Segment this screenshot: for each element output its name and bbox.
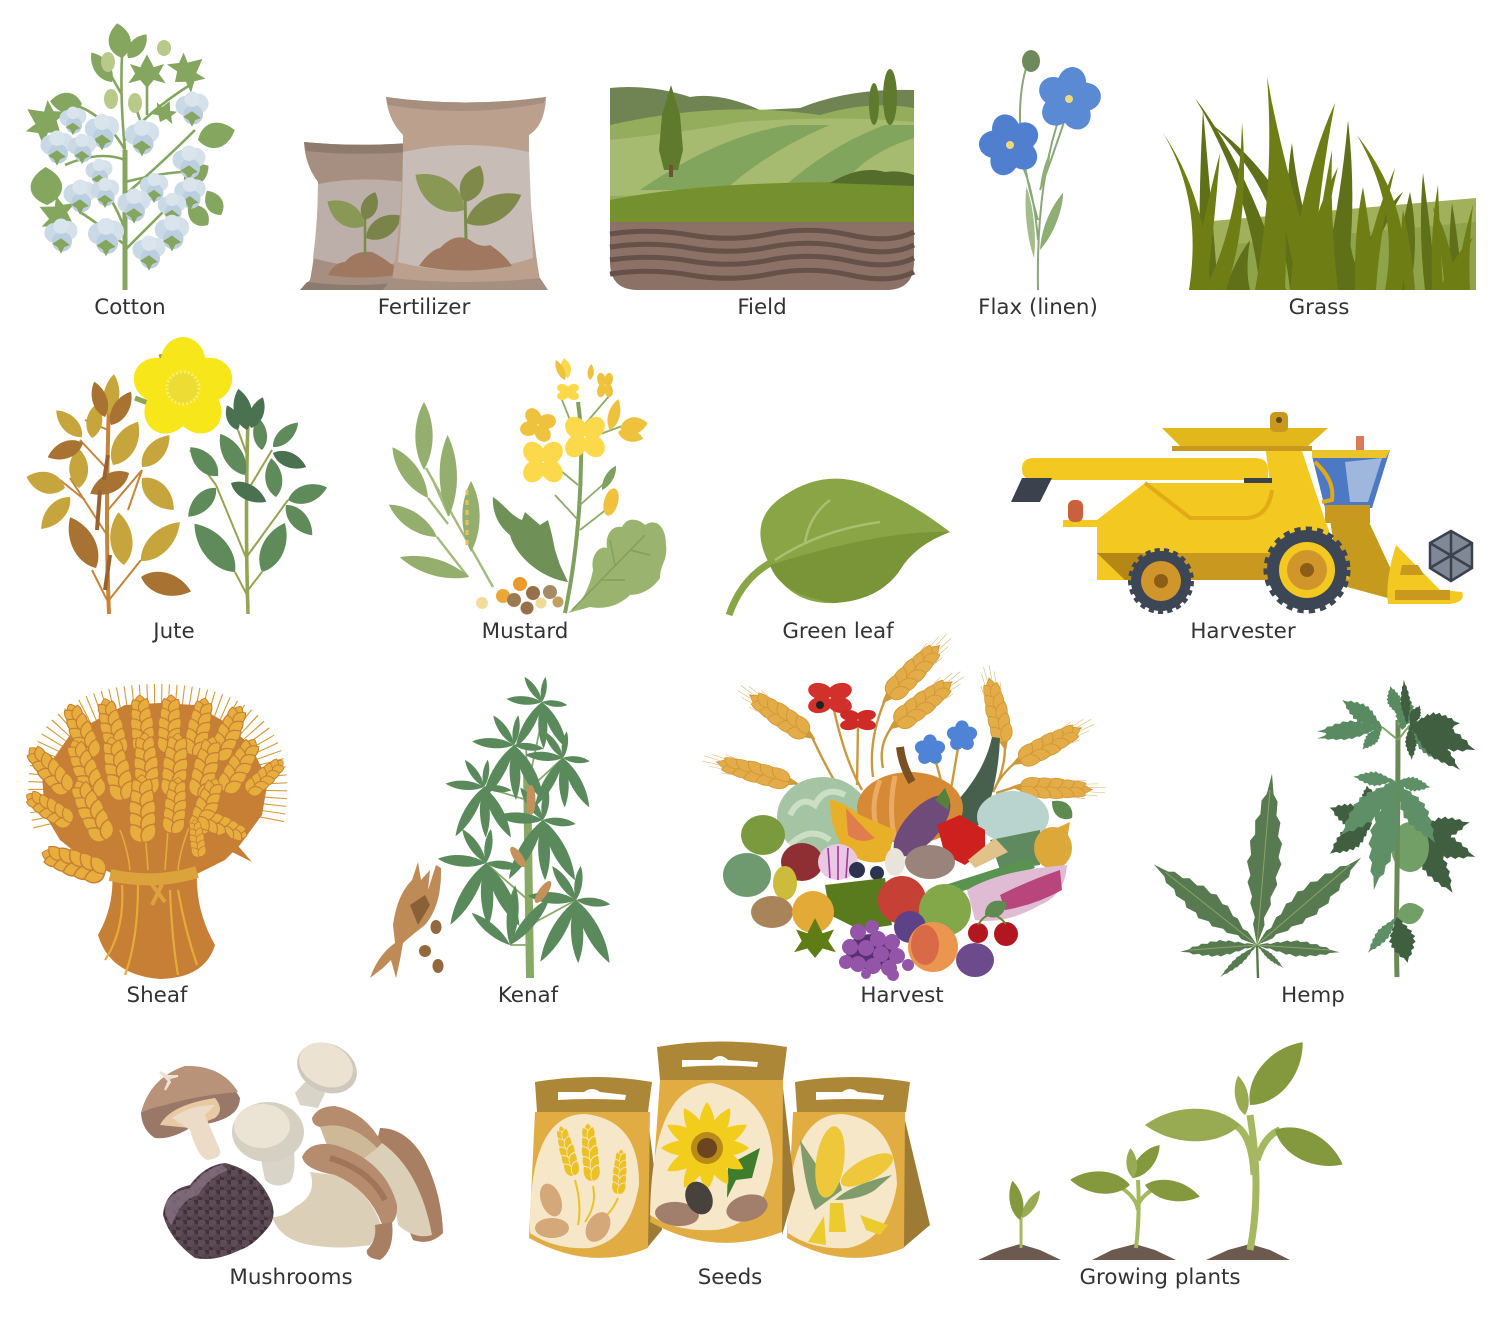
label: Mustard: Mustard [482, 619, 568, 644]
icon: hemp leaf [1145, 772, 1371, 980]
icon: kenaf plant [370, 675, 616, 978]
panel: seeds [529, 1042, 930, 1290]
icon: shiitake mushroom [141, 1066, 240, 1160]
label: Harvester: Harvester [1190, 619, 1296, 644]
icon: soil mounds [978, 1244, 1290, 1260]
panel: sheaf [18, 694, 291, 1008]
panel: green leaf [729, 479, 950, 644]
icon: seed packet sunflower [650, 1042, 795, 1243]
icon: jute plant [24, 337, 330, 614]
icon: seedling stages [1006, 1032, 1349, 1250]
label: Hemp: Hemp [1281, 983, 1345, 1008]
label: Jute: Jute [151, 619, 195, 644]
icon: large fertilizer bag [383, 97, 548, 290]
icon: harvest still life [700, 625, 1106, 981]
icon: flax plant [969, 50, 1109, 290]
label: Grass: Grass [1289, 295, 1349, 320]
label: Harvest: Harvest [860, 983, 944, 1008]
panel: field [610, 69, 914, 320]
label: Cotton: Cotton [94, 295, 166, 320]
icon: wheat sheaf [18, 694, 291, 979]
panel: harvest [700, 625, 1106, 1008]
icon: white button mushroom top [289, 1033, 365, 1108]
panel: mushrooms [141, 1033, 443, 1290]
panel: harvester [1011, 412, 1472, 644]
panel: grass [1163, 77, 1476, 320]
label: Fertilizer: Fertilizer [378, 295, 470, 320]
label: Seeds: Seeds [698, 1265, 762, 1290]
icon: grass tuft [1163, 77, 1476, 290]
panel: hemp [1145, 679, 1480, 1008]
icon: oyster mushrooms [272, 1106, 443, 1260]
label: Growing plants: Growing plants [1079, 1265, 1241, 1290]
icon: black truffle [163, 1163, 274, 1259]
icon: hemp plant [1316, 679, 1480, 977]
panel: mustard [384, 357, 666, 644]
icon: seed packet corn [787, 1077, 930, 1258]
panel: growing plants [978, 1032, 1349, 1290]
panel: jute [24, 337, 330, 644]
icon: farm field landscape [610, 69, 914, 290]
icon: mustard plant [384, 357, 666, 614]
label: Mushrooms: Mushrooms [229, 1265, 353, 1290]
icon: seed packet wheat [529, 1077, 662, 1258]
icon: green leaf [729, 479, 950, 615]
icon: combine harvester [1011, 412, 1472, 611]
panel: cotton [15, 22, 238, 320]
label: Flax (linen): Flax (linen) [978, 295, 1098, 320]
label: Green leaf: Green leaf [782, 619, 894, 644]
icon: white button mushroom middle [232, 1102, 304, 1186]
label: Field: Field [737, 295, 787, 320]
icon: cotton plant [15, 22, 238, 290]
panel: kenaf [370, 675, 616, 1008]
label: Sheaf: Sheaf [127, 983, 188, 1008]
panel: fertilizer [300, 97, 548, 320]
label: Kenaf: Kenaf [498, 983, 559, 1008]
panel: flax [969, 50, 1109, 320]
icon: small fertilizer bag [300, 142, 410, 290]
